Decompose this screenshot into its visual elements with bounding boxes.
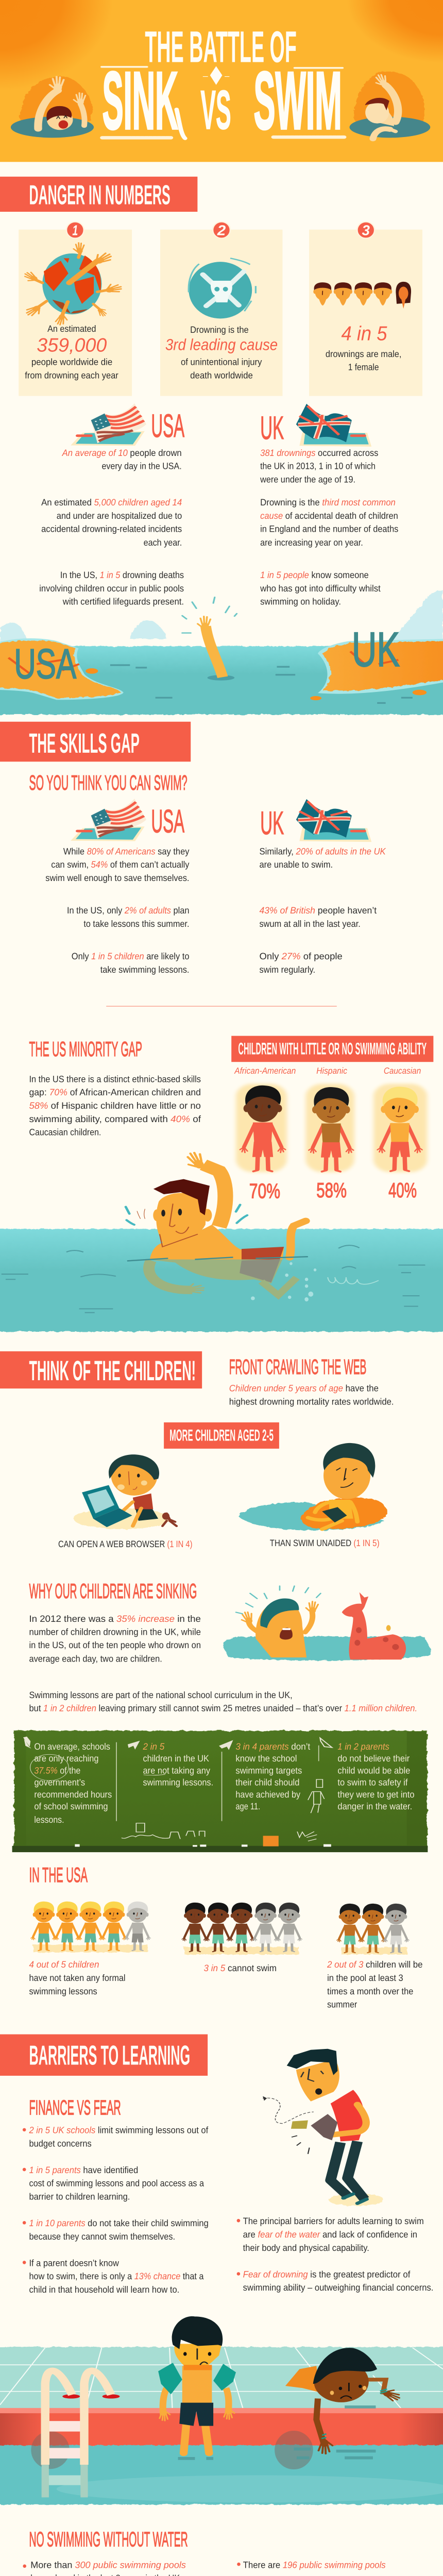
map label: USA: USA [14,640,76,687]
swimming curriculum text: Swimming lessons are part of the national school curriculum in the UK, [29,1690,293,1700]
why sinking text: In 2012 there was a 35% increase in the [29,1614,201,1624]
badge 1 [66,222,84,238]
finance bullets: budget concerns [29,2139,92,2149]
icon: UK flag [296,799,371,842]
badge 2 [213,222,230,238]
chart: Caucasian child: Caucasian [384,1066,421,1076]
text: DANGER IN NUMBERS [29,179,171,210]
USA facts: An estimated 5,000 children aged 14 [41,497,182,507]
UK skills text: are unable to swim. [259,859,333,870]
front crawling text [229,1383,394,1407]
UK facts: were under the age of 19. [260,474,355,484]
icon: USA flag [71,403,146,446]
stat 3 text [326,322,401,372]
why sinking text [29,1614,201,1664]
chalk column 3: swimming targets [235,1766,302,1776]
USA facts: with certified lifeguards present. [62,597,184,607]
stat 2 text [165,325,278,380]
UK facts: 381 drownings occurred across [260,448,378,458]
USA skills text: Only 1 in 5 children are likely to [72,951,189,961]
UK skills text: 43% of British people haven’t [259,905,377,916]
UK facts: who has got into difficulty whilst [260,583,381,594]
pictogram: 3 in 5 children [182,1903,302,1954]
minority gap text: gap: 70% of African-American children and [29,1087,201,1097]
text: UK [260,410,284,446]
header panel [0,0,443,162]
stat 1 text: people worldwide die [31,357,112,367]
chalk column 3: have achieved by [235,1789,300,1800]
finance bullets: 2 in 5 UK schools limit swimming lessons out of [29,2125,209,2135]
chalk column 3: 3 in 4 parents don’t [235,1741,310,1752]
USA facts: each year. [144,537,182,548]
badge 2: 2 [217,222,226,238]
pool closure bullets: More than 300 public swimming pools [30,2560,186,2570]
USA stat 2: 3 in 5 cannot swim [203,1963,277,1973]
UK skills text: swim regularly. [259,964,315,975]
UK facts: are increasing year on year. [260,537,363,548]
chalk column 1: lessons. [34,1815,64,1825]
text: FINANCE VS FEAR [29,2096,121,2119]
chalk column 3 [235,1741,310,1811]
finance bullets: 1 in 10 parents do not take their child swimming [29,2218,209,2228]
stat 1 text: 359,000 [37,334,107,356]
USA facts: and under are hospitalized due to [57,511,182,521]
illustration: child in shallow water [238,1443,386,1530]
text: THE US MINORITY GAP [29,1037,142,1060]
banner: more children aged 2-5 [164,1422,279,1449]
finance bullets: because they cannot swim themselves. [29,2231,175,2242]
minority gap text: Caucasian children. [29,1127,101,1138]
caption: web browser: CAN OPEN A WEB BROWSER (1 IN 4) [58,1539,193,1549]
finance bullets: barrier to children learning. [29,2191,130,2201]
chart: Hispanic child: 58% [316,1178,347,1202]
text: UK [260,805,284,841]
icon: globe with hands [22,243,123,326]
USA facts: involving children occur in public pools [39,583,184,594]
stat 1 text [25,324,118,380]
text: USA [151,408,184,444]
why sinking text: number of children drowning in the UK, while [29,1627,201,1637]
illustration: pool without water [0,2316,443,2504]
USA skills text: take swimming lessons. [100,964,189,975]
chart: African-American child: African-American [234,1066,296,1076]
chalk column 2: are not taking any [143,1766,210,1776]
UK facts: the UK in 2013, 1 in 10 of which [260,461,376,471]
USA skills text: While 80% of Americans say they [63,846,189,856]
chalk column 3: age 11. [235,1801,260,1811]
stat 2 text: of unintentional injury [181,357,262,367]
London pools bullet [237,2560,407,2576]
icon: UK flag [296,404,371,447]
USA stat 3 [327,1959,423,2010]
pictogram: 4 out of 5 children [31,1902,150,1952]
stat 2 text: death worldwide [190,370,253,380]
caption: swim unaided: THAN SWIM UNAIDED (1 IN 5) [270,1538,380,1548]
text: USA [151,803,184,839]
USA stat 3: summer [327,1999,357,2010]
front crawling text: Children under 5 years of age have the [229,1383,379,1393]
chalk doodles [122,1780,325,1841]
chart: Hispanic child: Hispanic [316,1066,347,1076]
icon: five faces [313,282,411,309]
USA skills text: In the US, only 2% of adults plan [67,905,189,916]
girl reaching down [285,2348,402,2454]
finance bullets: how to swim, there is only a 13% chance that a [29,2271,204,2281]
stat 2 text: 3rd leading cause [165,336,278,354]
illustration: water with swimmer [0,1151,443,1331]
chart: Caucasian child [373,1066,427,1202]
section heading: think of the children [0,1351,202,1388]
eraser [263,1836,279,1846]
finance bullets [23,2125,209,2295]
chalk column 1: government’s [34,1777,85,1788]
minority gap text: swimming ability, compared with 40% of [29,1114,201,1124]
badge 3: 3 [362,222,370,238]
chalk column 1: of school swimming [34,1801,108,1811]
illustration: worried man with empty wallet [263,2049,384,2206]
panel: stat card 3 [309,222,422,396]
chalk column 1: are only reaching [34,1753,98,1764]
panel: chalkboard [12,1731,428,1852]
illustration: child in distress and giraffe float [223,1586,431,1660]
chart banner: children with little or no swimming ability [231,1036,433,1062]
minority gap text: 58% of Hispanic children have little or no [29,1100,201,1111]
USA stat 1: 4 out of 5 children [29,1959,99,1970]
panel: stat card 1 [19,222,132,396]
chalk column 4: 1 in 2 parents [337,1741,389,1752]
chalk column 2: 2 in 5 [143,1741,164,1752]
chalk column 4 [337,1741,415,1811]
swimming curriculum text [29,1690,417,1714]
chalk arrows [23,1737,332,1750]
USA facts: every day in the USA. [101,461,182,471]
stat 3 text: 4 in 5 [342,322,387,345]
UK skills text [259,846,386,975]
title [101,22,344,146]
UK skills text: Only 27% of people [259,951,343,961]
stat 3 text: drownings are male, [326,349,401,359]
finance bullets: If a parent doesn’t know [29,2258,119,2268]
minority gap text [29,1074,201,1138]
illustration: beach map with drowning hand [0,590,443,715]
chart: Caucasian child: 40% [388,1178,417,1202]
UK facts: 1 in 5 people know someone [260,570,369,580]
UK facts: swimming on holiday. [260,597,341,607]
section heading: the skills gap [0,722,191,761]
why sinking text: average each day, two are children. [29,1653,162,1664]
USA skills text: swim well enough to save themselves. [45,873,189,883]
USA stat 1 [29,1959,126,1996]
illustration: sinking man [11,76,94,138]
illustration: swimming man [349,72,430,139]
finance bullets: cost of swimming lessons and pool access as a [29,2178,204,2189]
finance bullets: child in that household will learn how to. [29,2284,179,2295]
USA facts: accidental drowning-related incidents [41,524,182,534]
USA skills text: can swim, 54% of them can’t actually [51,859,189,870]
badge 1: 1 [72,222,78,238]
UK facts [260,448,398,607]
chalk column 3: their child should [235,1777,299,1788]
USA skills text: to take lessons this summer. [83,919,189,929]
map label: UK: UK [352,622,400,676]
stat 1 text: from drowning each year [25,370,118,380]
chalk column 2: children in the UK [143,1753,209,1764]
finance bullets: 1 in 5 parents have identified [29,2165,138,2175]
boy with armbands [158,2316,236,2453]
chalk column 2 [143,1741,213,1788]
icon: USA flag [71,799,146,841]
chalk column 2: swimming lessons. [143,1777,213,1788]
swimming curriculum text: but 1 in 2 children leaving primary still cannot swim 25 metres unaided – that’s over 1.1 million children. [29,1703,417,1714]
chart: African-American child: 70% [249,1179,280,1202]
USA facts [39,448,184,607]
UK facts: Drowning is the third most common [260,497,396,507]
stat 2 text: Drowning is the [190,325,249,335]
chalk column 1: On average, schools [34,1741,110,1752]
UK skills text: swum at all in the last year. [259,919,361,929]
fear bullets [237,2216,433,2293]
chalk column 1: recommended hours [34,1789,112,1800]
minority gap text: In the US there is a distinct ethnic-based skills [29,1074,201,1084]
chart: African-American child [234,1066,296,1202]
stat 1 text: An estimated [47,324,96,334]
fear bullets: their body and physical capability. [243,2243,369,2253]
section heading: barriers to learning [0,2035,208,2076]
why sinking text: in the US, out of the ten people who drown on [29,1640,201,1650]
chalk column 4: do not believe their [337,1753,410,1764]
USA skills text [45,846,189,975]
badge 3 [357,222,374,238]
USA stat 1: have not taken any formal [29,1973,126,1983]
chalk column 1: 37.5% of the [34,1766,80,1776]
pool closure bullets [23,2560,186,2576]
title: VS [200,79,231,141]
section heading: danger in numbers [0,177,197,212]
UK skills text: Similarly, 20% of adults in the UK [259,846,386,856]
chalk column 3: know the school [235,1753,297,1764]
USA facts: In the US, 1 in 5 drowning deaths [60,570,184,580]
chalk pieces [75,1844,331,1846]
USA stat 1: swimming lessons [29,1986,97,1996]
illustration: child at laptop [74,1454,177,1529]
USA stat 3: in the pool at least 3 [327,1973,403,1983]
chart: Hispanic child [305,1066,354,1202]
chalk column 1 [30,1741,112,1825]
text: IN THE USA [29,1863,88,1887]
icon: skull and crossbones [189,258,255,318]
panel: stat card 2 [160,222,282,396]
pool ladder [45,2371,120,2497]
chalk column 4: to swim to safety if [337,1777,408,1788]
pictogram: 2 out of 3 children [337,1904,409,1954]
London pools bullet: There are 196 public swimming pools [243,2560,386,2570]
USA facts: An average of 10 people drown [62,448,182,458]
title: SINK [103,55,178,146]
stat 3 text: 1 female [348,362,379,372]
section heading: the skills gap: THE SKILLS GAP [29,727,140,758]
chalk column 4: child would be able [337,1766,410,1776]
